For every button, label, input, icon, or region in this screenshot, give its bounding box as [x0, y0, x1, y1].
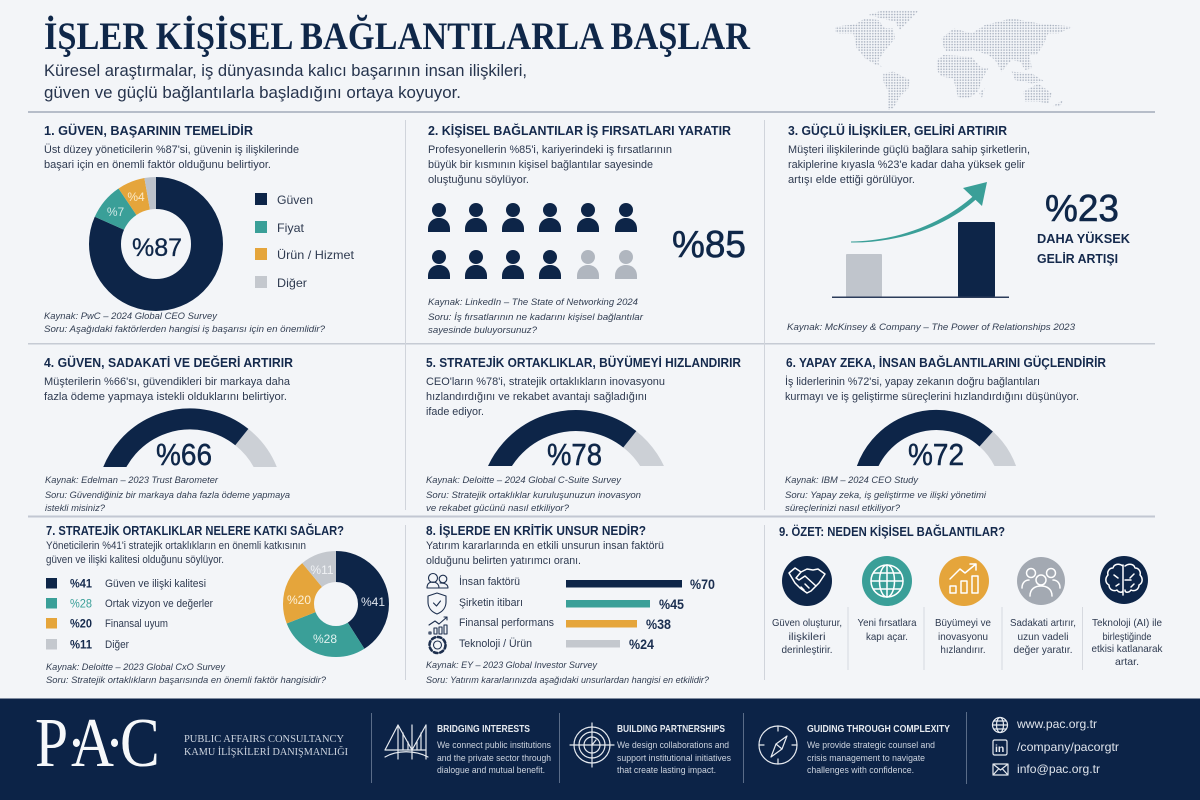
stat 23: %23 [1045, 188, 1119, 230]
block: guiding through complexity: GUIDING THROUGH COMPLEXITY [807, 724, 950, 735]
heading 8: 8. İŞLERDE EN KRİTİK UNSUR NEDİR? [426, 523, 646, 538]
donut chart 1 [105, 190, 207, 295]
heading 3: 3. GÜÇLÜ İLİŞKİLER, GELİRİ ARTIRIR [788, 123, 1008, 138]
text 8: Yatırım kararlarında en etkili unsurun insan faktörü [426, 540, 664, 552]
heading 5: 5. STRATEJİK ORTAKLIKLAR, BÜYÜMEYİ HIZLANDIRIR [426, 355, 742, 370]
text 2: büyük bir kısmının kişisel bağlantılar sayesinde [428, 159, 653, 171]
gauge 72: %72 [908, 437, 964, 472]
summary captions: Yeni fırsatlara [858, 618, 917, 629]
text 7 [46, 540, 306, 566]
legend 1: Ürün / Hizmet [277, 248, 355, 262]
heading 2: 2. KİŞİSEL BAĞLANTILAR İŞ FIRSATLARI YARATIR [428, 123, 732, 138]
legend 1: Güven [277, 193, 313, 207]
text 3: rakiplerine kıyasla %23'e kadar daha yüksek gelir [788, 159, 1025, 171]
text 1: başari için en önemli faktör olduğunu belirtiyor. [44, 159, 271, 171]
text 8 [426, 540, 664, 567]
text 2: oluştuğunu söylüyor. [428, 174, 529, 186]
summary captions: hızlandırır. [940, 645, 986, 656]
people pictogram [428, 203, 637, 279]
contact: website: www.pac.org.tr [1016, 717, 1097, 731]
text 2: Profesyonellerin %85'i, kariyerindeki iş fırsatlarının [428, 144, 672, 156]
donut chart 1: %87 [132, 234, 182, 262]
text 3: Müşteri ilişkilerinde güçlü bağlara sahip şirketlerin, [788, 144, 1030, 156]
source 8: Kaynak: EY – 2023 Global Investor Survey [426, 660, 598, 671]
legend 7: %11 [70, 640, 93, 652]
text 3 [788, 144, 1030, 186]
panel 4: loyalty [44, 355, 294, 514]
panel 8: critical factor [426, 523, 715, 686]
bar chart 8: %70 [690, 577, 715, 592]
stat 85: %85 [672, 224, 746, 266]
source 7 [46, 662, 327, 686]
source 6: süreçlerinizi nasıl etkiliyor? [785, 503, 901, 514]
block: bridging interests: dialogue and mutual benefit. [437, 765, 545, 775]
text 4 [44, 376, 290, 403]
text 5: ifade ediyor. [426, 406, 484, 418]
gauge 66: %66 [156, 437, 212, 472]
panel 6: AI [785, 355, 1107, 514]
text 1: Üst düzey yöneticilerin %87'si, güvenin iş ilişkilerinde [44, 144, 299, 156]
block: building partnerships: BUILDING PARTNERSHIPS [617, 724, 725, 735]
block: building partnerships: that create lasting impact. [617, 765, 716, 775]
contact: linkedin: in [995, 743, 1004, 755]
summary captions: Güven oluşturur, [772, 618, 842, 629]
block: guiding through complexity: We provide strategic counsel and [807, 740, 935, 750]
icon: bridge [385, 725, 428, 759]
summary captions: kapı açar. [866, 632, 908, 643]
heading 9: 9. ÖZET: NEDEN KİŞİSEL BAĞLANTILAR? [779, 524, 1005, 539]
subtitle: güven ve güçlü bağlantılarla başladığını ortaya koyuyor. [44, 84, 461, 102]
icon: compass [759, 726, 797, 764]
source 8: Soru: Yatırım kararlarınızda aşağıdaki unsurlardan hangisi en etkilidir? [426, 675, 710, 686]
contact: website [992, 717, 1097, 732]
block: building partnerships: support institutional initiatives [617, 753, 731, 763]
source 2: Soru: İş fırsatlarının ne kadarını kişisel bağlantılar [428, 312, 644, 323]
block: bridging interests: We connect public institutions [437, 740, 551, 750]
summary captions: etkisi katlanarak [1092, 644, 1163, 655]
source 5: Soru: Stratejik ortaklıklar kuruluşunuzun inovasyon [426, 490, 641, 501]
heading 1: 1. GÜVEN, BAŞARININ TEMELİDİR [44, 123, 254, 138]
text 2 [428, 144, 672, 186]
block: guiding through complexity [807, 724, 950, 775]
panel 5: partnerships [426, 355, 742, 514]
contact: email: info@pac.org.tr [1017, 762, 1100, 776]
block: bridging interests: and the private sector through [437, 753, 551, 763]
block: bridging interests: BRIDGING INTERESTS [437, 724, 530, 735]
source 2: sayesinde buluyorsunuz? [428, 325, 538, 336]
source 4 [45, 475, 290, 514]
source 1: Soru: Aşağıdaki faktörlerden hangisi iş başarısı için en önemlidir? [44, 324, 326, 335]
organization name: PUBLIC AFFAIRS CONSULTANCY [184, 734, 344, 745]
organization name [184, 734, 348, 758]
source 7: Kaynak: Deloitte – 2023 Global CxO Survey [46, 662, 226, 673]
bar chart 8: %24 [629, 637, 654, 652]
icon: finance [429, 617, 447, 634]
icon: shield [428, 593, 446, 614]
heading 4: 4. GÜVEN, SADAKATİ VE DEĞERİ ARTIRIR [44, 355, 294, 370]
gauge 78 [492, 420, 660, 485]
panel 3: revenue [787, 123, 1130, 333]
donut chart 7 [287, 563, 385, 646]
title: İŞLER KİŞİSEL BAĞLANTILARLA BAŞLAR [44, 13, 751, 58]
icon: people [427, 574, 448, 588]
source 4: istekli misiniz? [45, 503, 106, 514]
donut chart 7: %20 [287, 593, 311, 607]
text 5 [426, 376, 665, 418]
summary captions: ilişkileri [788, 632, 826, 643]
icon: target [570, 723, 614, 767]
source 4: Kaynak: Edelman – 2023 Trust Barometer [45, 475, 219, 486]
legend 7: Güven ve ilişki kalitesi [105, 578, 206, 590]
gauge 66 [110, 419, 270, 480]
stat 23 [1037, 188, 1130, 266]
icon: gear [430, 637, 446, 653]
source 6: Soru: Yapay zeka, iş geliştirme ve ilişki yönetimi [785, 490, 987, 501]
legend 7: %41 [70, 578, 93, 590]
logo: P·A·C [35, 705, 160, 782]
contact: linkedin: /company/pacorgtr [1017, 740, 1119, 754]
heading 7: 7. STRATEJİK ORTAKLIKLAR NELERE KATKI SAĞLAR? [46, 523, 344, 538]
summary captions: Teknoloji (AI) ile [1092, 618, 1162, 629]
world map [835, 10, 1073, 110]
icon: handshake [782, 556, 832, 606]
bar chart 8: İnsan faktörü [459, 575, 520, 588]
text 8: olduğunu belirten yatırımcı oranı. [426, 555, 581, 567]
stat 23: DAHA YÜKSEK [1037, 231, 1130, 246]
legend 7: %20 [70, 618, 92, 630]
block: building partnerships: We design collaborations and [617, 740, 729, 750]
text 6: kurmayı ve iş geliştirme süreçlerini hızlandırdığını düşünüyor. [785, 391, 1079, 403]
source 7: Soru: Stratejik ortaklıkların başarısında en önemli faktör hangisidir? [46, 675, 327, 686]
bar chart with growth arrow [832, 182, 1009, 298]
legend 7: Finansal uyum [105, 618, 168, 630]
block: building partnerships [617, 724, 731, 775]
summary captions: değer yaratır. [1014, 645, 1072, 656]
text 5: CEO'ların %78'i, stratejik ortaklıkların inovasyonu [426, 376, 665, 388]
legend 1 [255, 193, 355, 290]
text 7: Yöneticilerin %41'i stratejik ortaklıkların en önemli katkısının [46, 540, 306, 552]
source 5: ve rekabet gücünü nasıl etkiliyor? [426, 503, 570, 514]
source 8 [426, 660, 710, 686]
summary captions: Sadakati artırır, [1010, 618, 1076, 629]
summary captions: birleştiğinde [1102, 632, 1152, 643]
text 4: Müşterilerin %66'sı, güvendikleri bir markaya daha [44, 376, 290, 388]
source 6: Kaynak: IBM – 2024 CEO Study [785, 475, 919, 486]
summary captions: artar. [1115, 657, 1139, 668]
summary captions: Büyümeyi ve [935, 618, 991, 629]
panel 7: contributions [46, 523, 385, 686]
organization name: KAMU İLİŞKİLERİ DANIŞMANLIĞI [184, 746, 348, 758]
legend 7 [46, 578, 213, 652]
bar chart 8: %45 [659, 597, 684, 612]
text 1 [44, 144, 299, 171]
source 4: Soru: Güvendiğiniz bir markaya daha fazla ödeme yapmaya [45, 490, 290, 501]
legend 7: %28 [70, 598, 92, 610]
text 6 [785, 375, 1079, 403]
source 1: Kaynak: PwC – 2024 Global CEO Survey [44, 311, 218, 322]
panel 9: summary [772, 524, 1163, 670]
bar chart 8: %38 [646, 617, 671, 632]
bar chart 8 [459, 575, 715, 652]
summary captions [772, 618, 1163, 668]
source 1 [44, 311, 326, 335]
panel 2: opportunities [428, 123, 746, 336]
subtitle [44, 62, 527, 102]
donut chart 7: %28 [313, 632, 337, 646]
source 6 [785, 475, 987, 514]
stat 23: GELİR ARTIŞI [1037, 251, 1118, 266]
donut chart 1: %7 [107, 205, 124, 219]
text 5: hızlandırdığını ve rekabet avantajı sağladığını [426, 391, 647, 403]
text 3: artışı elde ettiği görülüyor. [788, 174, 915, 186]
donut chart 1: %4 [127, 190, 145, 204]
icon: community [1017, 557, 1065, 605]
text 7: güven ve ilişki kalitesi olduğunu söylüyor. [46, 554, 224, 566]
source 5: Kaynak: Deloitte – 2024 Global C-Suite Survey [426, 475, 622, 486]
summary captions: derinleştirir. [782, 645, 832, 656]
legend 7: Ortak vizyon ve değerler [105, 598, 213, 610]
summary captions: inovasyonu [938, 632, 988, 643]
subtitle: Küresel araştırmalar, iş dünyasında kalıcı başarının insan ilişkileri, [44, 62, 527, 80]
heading 6: 6. YAPAY ZEKA, İNSAN BAĞLANTILARINI GÜÇLENDİRİR [786, 355, 1107, 370]
donut chart 7: %11 [310, 563, 334, 577]
bar chart 8: Teknoloji / Ürün [459, 638, 532, 650]
legend 7: Diğer [105, 639, 129, 651]
source 5 [426, 475, 641, 514]
gauge 72 [863, 420, 1010, 482]
source 2: Kaynak: LinkedIn – The State of Networking 2024 [428, 297, 638, 308]
source 2 [428, 297, 644, 336]
block: bridging interests [437, 724, 551, 775]
panel 1: trust [44, 123, 355, 335]
legend 1: Diğer [277, 276, 307, 290]
text 4: fazla ödeme yapmaya istekli olduklarını belirtiyor. [44, 391, 287, 403]
gauge 78: %78 [547, 437, 602, 472]
block: guiding through complexity: crisis management to navigate [807, 753, 925, 763]
block: guiding through complexity: challenges with confidence. [807, 765, 914, 775]
icon: brain [1100, 556, 1148, 604]
bar chart 8: Şirketin itibarı [459, 597, 523, 609]
legend 1: Fiyat [277, 221, 305, 235]
donut chart 7: %41 [361, 595, 385, 609]
icon: growth chart [939, 556, 989, 606]
icon: globe [862, 556, 912, 606]
footer band [0, 698, 1200, 800]
bar chart 8: Finansal performans [459, 617, 555, 629]
summary captions: uzun vadeli [1018, 632, 1068, 643]
source 3: Kaynak: McKinsey & Company – The Power of Relationships 2023 [787, 322, 1076, 333]
text 6: İş liderlerinin %72'si, yapay zekanın doğru bağlantıları [785, 375, 1040, 388]
